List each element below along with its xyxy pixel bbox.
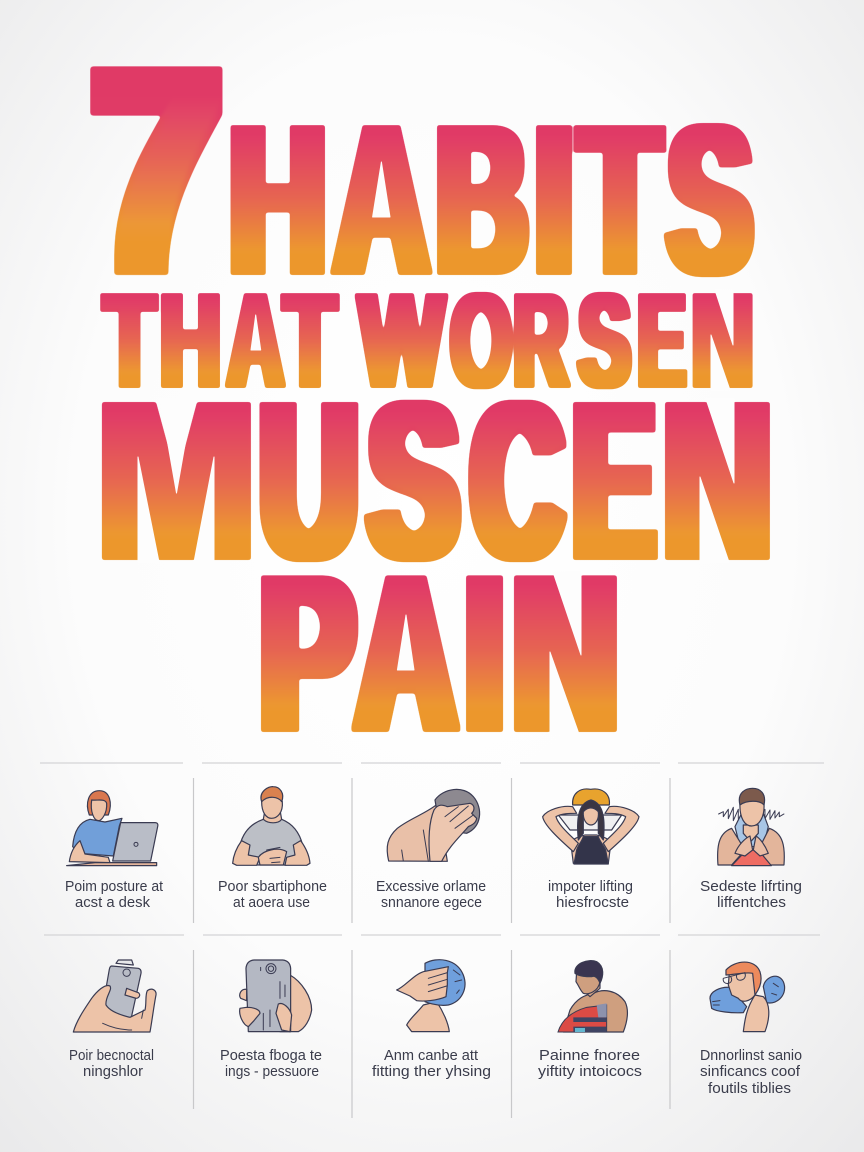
label: yiftity intoicocs [538, 1064, 642, 1080]
title line: PAIN: A [357, 532, 455, 776]
icon: head in hand [387, 789, 480, 861]
label: liffentches [717, 895, 786, 911]
title line: HABITS: I [535, 81, 573, 318]
icon: woman hands behind head [543, 789, 639, 864]
title line: THAT WORSEN: O [451, 267, 511, 414]
title line: THAT WORSEN: S [579, 267, 630, 414]
label: ings - pessuore [225, 1064, 319, 1080]
title line: HABITS: A [335, 81, 428, 318]
title line: THAT WORSEN: T [284, 267, 336, 414]
label [218, 879, 327, 911]
panel: habit 3 [376, 789, 486, 911]
icon: hand on blue pack [397, 960, 465, 1032]
title line: PAIN: I [466, 532, 503, 776]
title line: PAIN: P [261, 532, 354, 776]
icon: hand holding phone [240, 960, 312, 1032]
title line: MUSCEN: M [98, 357, 255, 604]
icon: hands tapping phone [73, 960, 156, 1032]
title line: THAT WORSEN: T [104, 267, 155, 414]
panel: habit 7 [220, 960, 322, 1080]
label: Poir becnoctal [69, 1048, 154, 1064]
title line: MUSCEN: N [664, 357, 771, 604]
label [372, 1048, 491, 1080]
panel: habit 10 [700, 962, 802, 1097]
label: acst a desk [75, 895, 151, 911]
title line: MUSCEN: E [574, 357, 654, 604]
label: sinficancs coof [700, 1064, 801, 1080]
label: fitting ther yhsing [372, 1064, 491, 1080]
label: snnanore egece [381, 895, 482, 911]
panel: habit 8 [372, 960, 491, 1080]
title line: THAT WORSEN: W [360, 267, 444, 414]
icon: person at laptop [67, 791, 158, 866]
label [700, 1048, 802, 1097]
label: Poesta fboga te [220, 1048, 322, 1064]
panel: habit 5 [700, 788, 802, 911]
label: hiesfrocste [556, 895, 629, 911]
label [538, 1048, 642, 1080]
label: Dnnorlinst sanio [700, 1048, 802, 1064]
title [90, 15, 771, 776]
label: foutils tiblies [708, 1081, 791, 1097]
title line: THAT WORSEN: H [160, 267, 221, 414]
icon: man slouching with red garment [558, 961, 628, 1032]
label [220, 1048, 322, 1080]
panel: habit 6 [69, 960, 156, 1080]
title numeral 7: 7 [90, 15, 223, 325]
icon: person with glasses and blue packs [710, 962, 785, 1032]
label: Excessive orlame [376, 879, 486, 895]
label: Poim posture at [65, 879, 163, 895]
label: ningshlor [83, 1064, 143, 1080]
label: Sedeste lifrting [700, 879, 802, 895]
label [700, 879, 802, 911]
label [376, 879, 486, 911]
title line: THAT WORSEN: E [638, 267, 685, 414]
title line: HABITS: H [230, 81, 326, 318]
title line: PAIN: N [513, 532, 618, 776]
panel: habit 4 [543, 789, 639, 911]
panel: habit 1 [65, 791, 163, 911]
label: at aoera use [233, 895, 310, 911]
label [548, 879, 633, 911]
title line: THAT WORSEN: R [514, 267, 568, 414]
title line: THAT WORSEN: A [228, 267, 283, 414]
icon: man with sound waves and neck pain [718, 788, 784, 866]
label: Painne fnoree [539, 1048, 640, 1064]
label: impoter lifting [548, 879, 633, 895]
title line: THAT WORSEN: N [692, 267, 753, 414]
label [65, 879, 163, 911]
label [69, 1048, 154, 1080]
icon: man with smartphone [233, 787, 310, 865]
title line: HABITS: T [580, 81, 660, 318]
label: Poor sbartiphone [218, 879, 327, 895]
label: Anm canbe att [384, 1048, 478, 1064]
title line: MUSCEN: S [369, 357, 458, 604]
panel: habit 9 [538, 961, 642, 1080]
title line: HABITS: B [437, 81, 527, 318]
panel: habit 2 [218, 787, 327, 911]
title line: MUSCEN: U [260, 357, 358, 604]
title line: MUSCEN: C [472, 357, 562, 604]
title line: HABITS: S [668, 81, 752, 318]
